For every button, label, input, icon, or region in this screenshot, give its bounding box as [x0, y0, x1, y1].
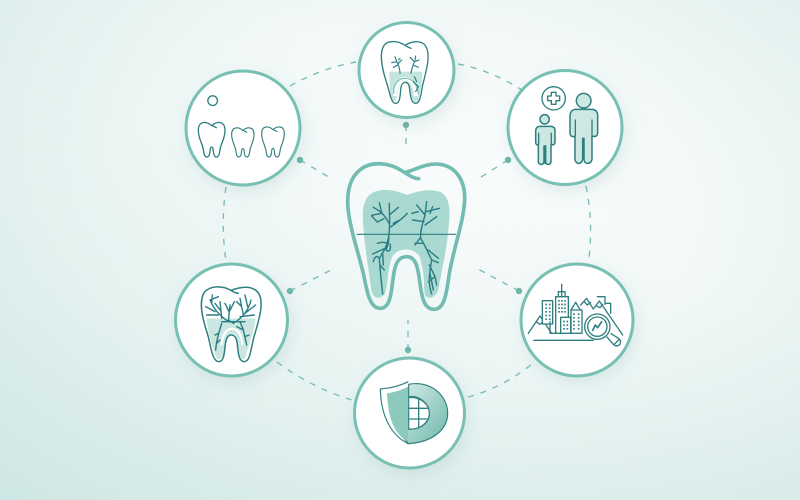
node: root canal tooth — [359, 22, 454, 118]
node circle — [186, 71, 300, 185]
globe grid — [409, 398, 429, 429]
node: branching nerves tooth — [176, 264, 288, 376]
nerve right — [412, 202, 439, 294]
node circle — [508, 70, 622, 184]
node: city and mountains under magnifier — [521, 264, 633, 376]
icon: shield with circular arrow and globe — [380, 382, 448, 444]
tooth outline — [348, 164, 465, 309]
nerve left — [372, 203, 407, 294]
node circle — [359, 22, 454, 118]
icon: tooth with branching nerves — [201, 287, 261, 362]
icon: row of teeth — [198, 96, 284, 157]
node: three teeth — [186, 71, 300, 185]
icon: adult, child and cross — [536, 87, 598, 164]
icon: skyline with magnifying glass — [528, 284, 623, 346]
shield — [387, 387, 408, 442]
gum line — [357, 233, 456, 236]
icon: tooth with roots — [381, 42, 428, 103]
central tooth — [348, 164, 465, 309]
node: shield and globe — [354, 358, 464, 468]
tooth pulp — [363, 190, 449, 298]
node circle — [176, 264, 288, 376]
connector dots — [287, 122, 522, 353]
dashed connector ring — [223, 62, 591, 400]
node circle — [354, 358, 464, 468]
node circle — [521, 264, 633, 376]
node: people with medical cross — [508, 70, 622, 184]
